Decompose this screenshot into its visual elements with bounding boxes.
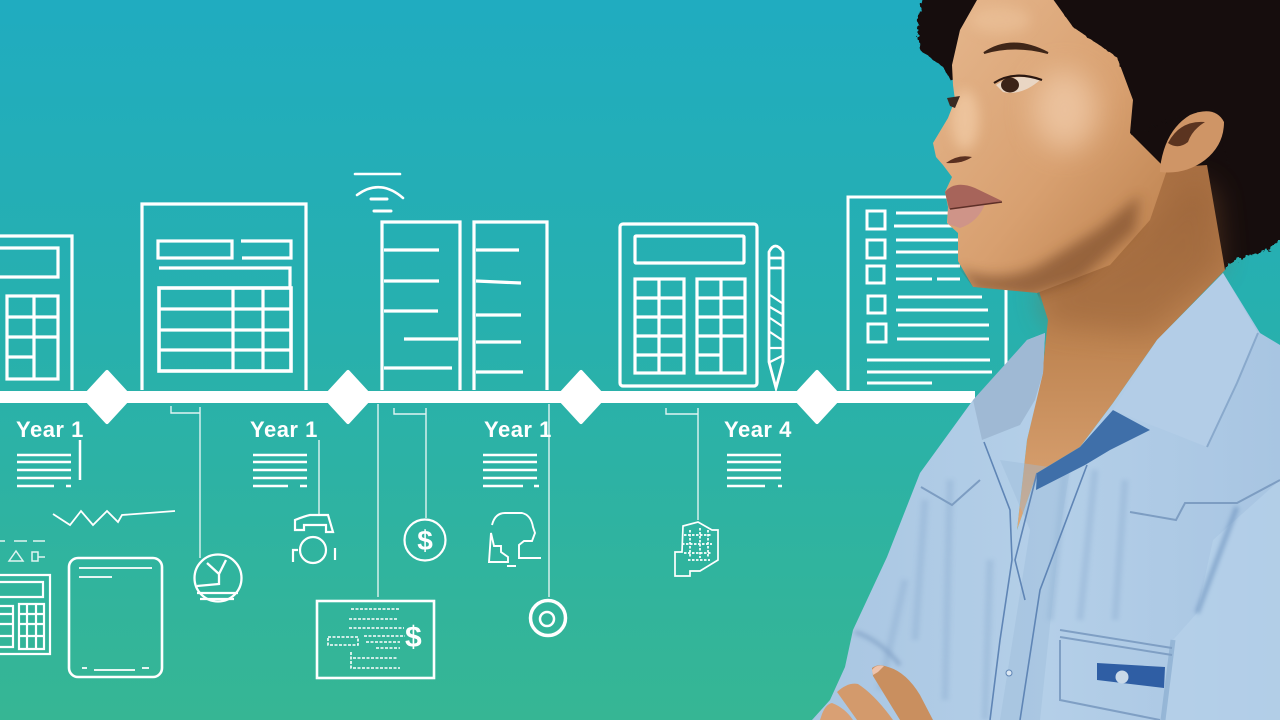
milestone 2 label xyxy=(250,417,318,486)
eyebrow xyxy=(984,44,1048,53)
timeline bar with diamonds xyxy=(0,372,975,422)
ear xyxy=(1160,111,1224,172)
milestone 3 label: Year 1 xyxy=(484,417,552,442)
icon: checklist document xyxy=(848,197,1006,390)
fingers xyxy=(820,665,933,720)
placket button xyxy=(1006,670,1012,676)
connector lines xyxy=(171,404,698,597)
milestone 4 label xyxy=(724,417,792,486)
icon: ledger table document xyxy=(142,204,306,390)
icon: pie circle xyxy=(194,554,242,602)
milestone 2 label: Year 1 xyxy=(250,417,318,442)
milestone 4 label: Year 4 xyxy=(724,417,792,442)
icon: spiral target xyxy=(530,600,566,636)
shirt body xyxy=(812,273,1280,720)
icon: calculator with pencil xyxy=(620,224,783,388)
icon: dollar coin xyxy=(404,520,446,560)
icon: tablet xyxy=(69,558,162,677)
nose highlight xyxy=(951,90,979,150)
face and head xyxy=(930,0,1167,296)
icon: dollar coin: $ xyxy=(417,525,433,556)
placket stitching xyxy=(984,442,1087,720)
yoke seams xyxy=(921,480,1280,520)
hairline overlay xyxy=(1047,0,1280,170)
right collar flap xyxy=(1113,273,1258,447)
icon: document cluster xyxy=(675,522,718,576)
icon: two column documents xyxy=(382,222,547,390)
pocket xyxy=(1060,630,1172,720)
fingernail xyxy=(872,666,884,675)
neck shadow xyxy=(1037,180,1222,335)
shirt folds xyxy=(855,460,1280,720)
lips xyxy=(945,185,1002,228)
neck xyxy=(1017,165,1225,530)
milestone 1 label: Year 1 xyxy=(16,417,84,442)
person xyxy=(812,0,1280,720)
left collar xyxy=(973,333,1045,440)
icon: headset head xyxy=(489,513,541,566)
dollar sign: $ xyxy=(405,621,422,654)
icon: small calculator xyxy=(0,575,50,654)
icon: small glyph row xyxy=(0,541,45,561)
icon: zigzag trend xyxy=(53,511,175,525)
icon: left calculator xyxy=(0,236,72,390)
near eye xyxy=(994,76,1042,93)
icon: wifi signal xyxy=(355,174,403,211)
milestone diamond 4 xyxy=(794,372,840,422)
hair xyxy=(917,0,1280,300)
forehead highlight xyxy=(976,9,1026,32)
nostril xyxy=(946,156,972,163)
milestone diamond 2 xyxy=(325,372,371,422)
icon: report box with dollar xyxy=(317,601,434,678)
pocket button xyxy=(1116,670,1128,684)
milestone diamond 1 xyxy=(84,372,130,422)
stubble jaw shadow xyxy=(958,195,1140,296)
icon: person outline xyxy=(293,515,335,563)
milestone 1 label xyxy=(16,417,84,486)
milestone diamond 3 xyxy=(558,372,604,422)
milestone 3 label xyxy=(483,417,552,486)
cheek highlight xyxy=(1033,70,1097,150)
inner collar dark band xyxy=(1036,410,1150,490)
far eye xyxy=(947,96,960,108)
pocket button flap xyxy=(1097,663,1165,688)
